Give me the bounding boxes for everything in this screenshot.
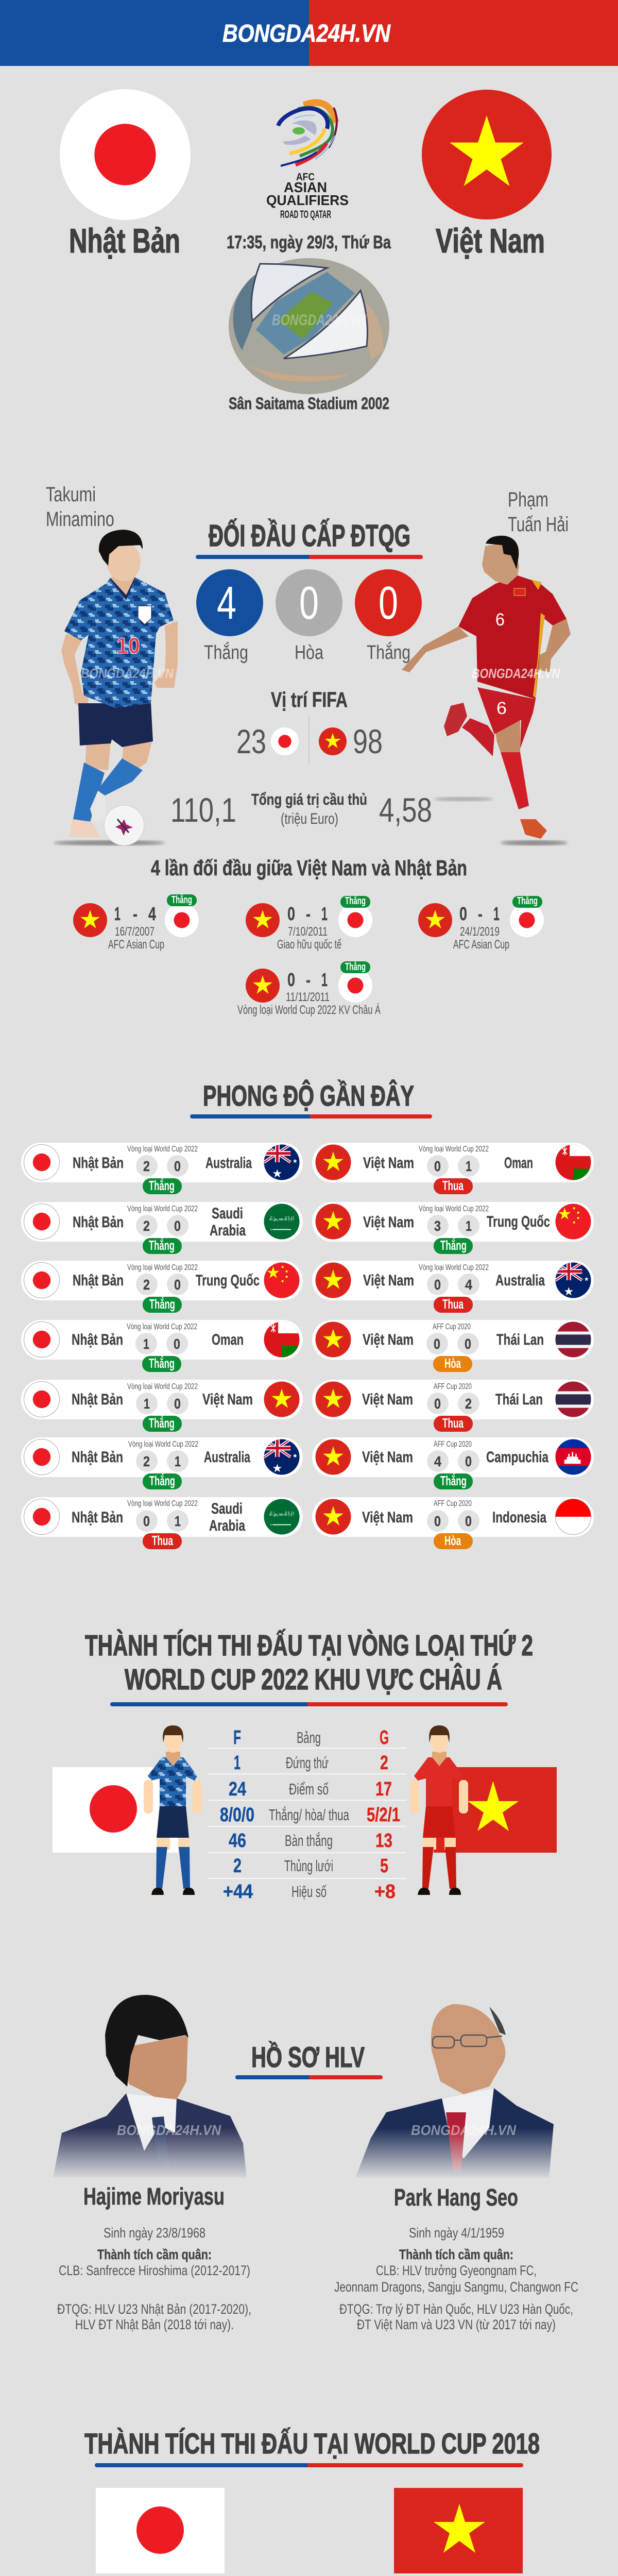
stat: Japan wins: 4 — [217, 578, 236, 629]
Japan vs Australia: 2 — [143, 1158, 150, 1174]
table row: position: 2 — [380, 1752, 388, 1774]
table row: points: 17 — [375, 1778, 392, 1800]
meeting 4: Vòng loại World Cup 2022 KV Châu Á — [237, 1003, 381, 1017]
table row: goals for — [229, 1830, 392, 1852]
Vietnam vs Cambodia: AFF Cup 2020 — [434, 1440, 472, 1449]
Japan vs Oman: Thắng — [149, 1355, 175, 1371]
Vietnam vs Cambodia: Việt Nam — [362, 1449, 413, 1466]
comparison table — [208, 1727, 406, 1903]
Japan vs Saudi Arabia (2): Saudi — [211, 1500, 243, 1517]
flag: Vietnam — [394, 2488, 523, 2573]
meeting 2: - — [306, 903, 311, 924]
Japan vs Vietnam — [21, 1380, 303, 1432]
table row: position — [234, 1752, 388, 1774]
Japan vs Vietnam: Vòng loại World Cup 2022 — [127, 1382, 198, 1391]
section: head to head — [73, 519, 544, 1017]
stat: Vietnam wins: 0 — [379, 578, 398, 629]
flag: Vietnam rectangle — [434, 1767, 557, 1853]
Japan vs Vietnam: 0 — [174, 1396, 181, 1412]
player: Phạm Tuấn Hải: 6 — [495, 610, 505, 630]
meeting 3: Thắng — [517, 894, 538, 907]
Vietnam vs Thailand: 0 — [434, 1336, 440, 1352]
Japan vs Saudi Arabia: Vòng loại World Cup 2022 — [127, 1205, 198, 1213]
Vietnam vs China — [312, 1202, 594, 1254]
section: coach profiles — [49, 1995, 578, 2332]
Vietnam vs Australia: Việt Nam — [363, 1272, 414, 1289]
Vietnam vs Oman: Oman — [504, 1155, 533, 1172]
flag: Vietnam — [422, 90, 552, 219]
table row: record — [220, 1804, 400, 1826]
Vietnam vs Australia: Vòng loại World Cup 2022 — [419, 1263, 489, 1272]
stadium caption: Sân Saitama Stadium 2002 — [229, 394, 389, 413]
table row: goals for: 46 — [229, 1830, 246, 1852]
player: Takumi Minamino: 10 — [116, 633, 140, 658]
section: recent form — [21, 1079, 594, 1549]
stat: draws — [276, 569, 342, 664]
Vietnam vs Thailand (2): 2 — [465, 1396, 472, 1412]
table row: goals against: 5 — [380, 1855, 388, 1877]
table row: position: Đứng thứ — [286, 1754, 329, 1772]
Japan vs Saudi Arabia: 0 — [174, 1218, 181, 1234]
Japan vs Australia: Australia — [205, 1155, 252, 1172]
Japan vs Saudi Arabia: Thắng — [149, 1238, 175, 1253]
Vietnam vs Oman: Việt Nam — [363, 1155, 414, 1172]
FIFA ranking: 98 — [353, 722, 383, 760]
Vietnam vs Thailand: AFF Cup 2020 — [433, 1323, 471, 1331]
Japan vs Saudi Arabia (2) — [21, 1497, 303, 1549]
FIFA ranking: 23 — [236, 722, 266, 760]
table row: goals against — [233, 1855, 388, 1877]
table row: group: Bảng — [297, 1728, 321, 1747]
Vietnam vs Thailand (2): 0 — [434, 1396, 441, 1412]
heading underline — [110, 1702, 508, 1706]
Japan vs Australia (2): Vòng loại World Cup 2022 — [128, 1440, 198, 1449]
portrait: Park Hang Seo: BONGDA24H.VN — [411, 2122, 517, 2138]
table row: goals against: Thủng lưới — [284, 1857, 333, 1875]
Vietnam vs Cambodia: 0 — [465, 1453, 472, 1469]
Vietnam vs Indonesia: Indonesia — [492, 1509, 546, 1526]
table row: goals against: 2 — [233, 1855, 242, 1877]
meeting 1: AFC Asian Cup — [108, 938, 164, 952]
Vietnam vs China: 3 — [434, 1218, 441, 1234]
table row: record: Thắng/ hòa/ thua — [269, 1806, 349, 1824]
meeting 2: 0 — [287, 903, 295, 924]
Vietnam vs Indonesia: Việt Nam — [362, 1509, 413, 1526]
squad value: 110,1 — [170, 791, 236, 829]
AFC Asian Qualifiers logo: ASIAN — [284, 179, 327, 195]
Vietnam vs Australia: 0 — [434, 1277, 441, 1293]
coach bio: Moriyasu — [57, 2183, 251, 2332]
Japan vs Vietnam: 1 — [144, 1396, 150, 1412]
Vietnam vs Thailand: 0 — [465, 1336, 471, 1352]
Vietnam vs Australia — [312, 1261, 594, 1313]
meeting 4: 1 — [321, 969, 328, 990]
FIFA ranking: Vị trí FIFA — [271, 688, 348, 711]
stat: Japan wins: Thắng — [204, 641, 248, 664]
meeting 2: Thắng — [345, 894, 366, 907]
Japan vs Saudi Arabia (2): Thua — [152, 1533, 173, 1548]
Japan vs Saudi Arabia (2): 0 — [143, 1513, 150, 1529]
Japan vs Australia: 0 — [174, 1158, 181, 1174]
figure: Japan kit — [144, 1725, 202, 1895]
Vietnam vs Oman: 0 — [434, 1158, 441, 1174]
meeting 4 — [237, 960, 381, 1017]
coach bio: Moriyasu: Sinh ngày 23/8/1968 — [104, 2225, 205, 2241]
player: Takumi Minamino: Minamino — [46, 508, 114, 531]
meeting 3: 0 — [459, 903, 467, 924]
Vietnam vs Oman — [312, 1143, 594, 1194]
Vietnam vs Australia: 4 — [465, 1277, 472, 1293]
table row: points: 24 — [229, 1778, 246, 1800]
match header — [60, 89, 552, 260]
Japan vs Australia: Nhật Bản — [73, 1155, 124, 1172]
Japan vs Australia (2): Australia — [204, 1449, 250, 1466]
Vietnam vs Thailand (2): AFF Cup 2020 — [434, 1382, 472, 1391]
table row: goal difference: Hiệu số — [291, 1883, 327, 1901]
Vietnam vs Indonesia: Hòa — [444, 1533, 461, 1548]
Japan vs Australia (2): Nhật Bản — [72, 1449, 123, 1466]
portrait: Hajime Moriyasu — [49, 1995, 252, 2180]
stadium illustration — [229, 258, 389, 394]
heading underline — [190, 1114, 432, 1118]
heading: PHONG ĐỘ GẦN ĐÂY — [203, 1079, 414, 1112]
meeting 2: Giao hữu quốc tế — [277, 938, 341, 952]
table row: goals for: 13 — [375, 1830, 392, 1852]
meeting 1: Thắng — [171, 893, 192, 906]
team name: Việt Nam: Việt Nam — [436, 222, 545, 260]
meeting 1: 1 — [114, 903, 121, 924]
flag: Japan — [60, 89, 191, 220]
squad value: Tổng giá trị cầu thủ — [251, 790, 367, 808]
Japan vs Saudi Arabia (2): Nhật Bản — [72, 1509, 123, 1526]
table row: group — [233, 1727, 389, 1749]
squad value: 4,58 — [379, 791, 432, 829]
Japan vs Vietnam: Thắng — [149, 1415, 175, 1431]
Vietnam vs Cambodia: Campuchia — [486, 1449, 548, 1466]
coach bio: Moriyasu: Thành tích cầm quân: — [97, 2247, 212, 2262]
Vietnam vs China: Trung Quốc — [487, 1213, 550, 1230]
Vietnam vs Oman: Vòng loại World Cup 2022 — [419, 1145, 489, 1154]
Japan vs Australia (2): Thắng — [149, 1473, 175, 1488]
Vietnam vs Thailand: Hòa — [444, 1355, 461, 1371]
Japan vs Vietnam: Nhật Bản — [72, 1391, 123, 1408]
meeting 4: Thắng — [345, 960, 366, 973]
header band — [0, 0, 618, 66]
squad value — [170, 790, 432, 829]
AFC Asian Qualifiers logo: AFC — [296, 172, 315, 183]
Vietnam vs Oman: Thua — [442, 1178, 464, 1193]
Japan vs Saudi Arabia (2): 1 — [175, 1513, 181, 1529]
table row: goal difference: +44 — [223, 1881, 253, 1903]
coach bio: Moriyasu: HLV ĐT Nhật Bản (2018 tới nay). — [75, 2317, 234, 2332]
Japan vs Saudi Arabia: Saudi — [212, 1205, 243, 1222]
meeting 2 — [246, 894, 372, 952]
Vietnam vs Indonesia — [312, 1497, 594, 1549]
Japan vs Australia — [21, 1143, 303, 1194]
figure: Vietnam kit — [410, 1725, 468, 1895]
stat: Vietnam wins — [355, 569, 422, 664]
Japan vs Saudi Arabia: Nhật Bản — [73, 1214, 124, 1231]
meeting 3: AFC Asian Cup — [453, 938, 509, 952]
Japan vs Oman — [21, 1320, 303, 1372]
Japan vs Vietnam: Việt Nam — [202, 1391, 253, 1408]
Japan vs Oman: Vòng loại World Cup 2022 — [127, 1323, 197, 1331]
meeting 1: 4 — [148, 903, 156, 924]
stat: draws: Hòa — [295, 642, 324, 664]
Vietnam vs Thailand (2): Thua — [442, 1415, 464, 1431]
meeting 2: 7/10/2011 — [288, 925, 328, 939]
stat: Vietnam wins: Thắng — [367, 641, 410, 664]
Vietnam vs Thailand: Thái Lan — [496, 1331, 544, 1348]
Japan vs Australia: Vòng loại World Cup 2022 — [127, 1145, 198, 1154]
portrait: Hajime Moriyasu: BONGDA24H.VN — [117, 2122, 221, 2138]
heading underline — [95, 2463, 523, 2467]
Japan vs China: Trung Quốc — [196, 1272, 260, 1289]
watermark: BONGDA24H.VN — [472, 666, 560, 681]
Japan vs Saudi Arabia (2): Vòng loại World Cup 2022 — [127, 1499, 198, 1508]
player: Phạm Tuấn Hải: 6 — [496, 699, 507, 718]
Vietnam vs Indonesia: 0 — [465, 1513, 472, 1529]
Japan vs Saudi Arabia: 2 — [143, 1218, 150, 1234]
meeting 3: 24/1/2019 — [460, 925, 500, 939]
Vietnam vs Australia: Australia — [495, 1272, 545, 1289]
Japan vs Saudi Arabia (2): Arabia — [209, 1517, 245, 1534]
table row: goal difference: +8 — [374, 1881, 396, 1903]
Japan vs Oman: 0 — [174, 1336, 180, 1352]
player name: Phạm — [508, 488, 548, 511]
section: World Cup 2022 qualifiers record — [53, 1629, 557, 1903]
meeting 1 — [73, 893, 199, 952]
Japan vs Australia (2): 2 — [143, 1453, 150, 1469]
coach bio: Park — [334, 2184, 578, 2332]
stat: Japan wins — [196, 569, 263, 664]
logo: BONGDA24H.VN — [222, 20, 391, 47]
Vietnam vs China: Thắng — [440, 1238, 467, 1253]
player: Phạm Tuấn Hải: Tuấn Hải — [508, 513, 569, 536]
Vietnam vs Australia: Thua — [442, 1296, 464, 1312]
Vietnam vs Indonesia: AFF Cup 2020 — [434, 1499, 472, 1508]
meeting 4: - — [306, 969, 311, 990]
squad value: (triệu Euro) — [281, 810, 338, 827]
Japan vs China: 0 — [174, 1277, 181, 1293]
Japan vs China — [21, 1261, 303, 1313]
Vietnam vs Indonesia: 0 — [434, 1513, 441, 1529]
Japan vs Saudi Arabia: Arabia — [210, 1222, 246, 1239]
Japan vs Australia (2) — [21, 1437, 303, 1489]
player: Takumi Minamino — [46, 483, 178, 845]
Japan vs China: 2 — [143, 1277, 150, 1293]
Japan vs Australia: Thắng — [149, 1178, 175, 1193]
Japan vs China: Vòng loại World Cup 2022 — [127, 1263, 198, 1272]
watermark: BONGDA24H.VN — [81, 666, 174, 681]
section: World Cup 2018 — [31, 2427, 543, 2576]
flag: Japan rectangle — [53, 1767, 178, 1853]
table row: group: G — [380, 1727, 389, 1749]
heading: ĐỐI ĐẦU CẤP ĐTQG — [209, 519, 410, 553]
AFC Asian Qualifiers logo: QUALIFIERS — [266, 192, 349, 208]
team name: Nhật Bản: Nhật Bản — [69, 222, 180, 260]
heading underline — [196, 555, 423, 559]
meeting 4: 0 — [287, 969, 295, 990]
Vietnam vs China: Vòng loại World Cup 2022 — [419, 1205, 489, 1213]
meeting 1: 16/7/2007 — [115, 925, 154, 939]
meeting 3 — [418, 894, 544, 952]
AFC Asian Qualifiers logo: ROAD TO QATAR — [280, 209, 331, 221]
Vietnam vs Cambodia — [312, 1437, 594, 1489]
coach bio: Moriyasu: CLB: Sanfrecce Hiroshima (2012-2017) — [59, 2263, 250, 2278]
coach bio: Park: ĐT Việt Nam và U23 VN (từ 2017 tới nay) — [357, 2317, 556, 2332]
Vietnam vs Cambodia: Thắng — [440, 1473, 467, 1488]
Vietnam vs China: Việt Nam — [363, 1214, 414, 1231]
coach bio: Park: Park Hang Seo — [394, 2184, 518, 2211]
stat: draws: 0 — [299, 578, 319, 629]
meeting 3: 1 — [493, 903, 500, 924]
coach bio: Park: Sinh ngày 4/1/1959 — [409, 2225, 504, 2241]
Vietnam vs Oman: 1 — [466, 1158, 472, 1174]
Japan vs Oman: Oman — [212, 1331, 244, 1348]
AFC Asian Qualifiers logo — [266, 103, 349, 221]
meeting 1: - — [133, 903, 138, 924]
table row: points — [229, 1778, 392, 1800]
coach bio: Park: CLB: HLV trưởng Gyeongnam FC, — [376, 2263, 537, 2278]
coach bio: Park: Thành tích cầm quân: — [399, 2247, 513, 2262]
Japan vs China: Thắng — [149, 1296, 175, 1312]
Vietnam vs Thailand (2): Thái Lan — [495, 1391, 543, 1408]
FIFA ranking — [236, 688, 383, 765]
portrait: Park Hang Seo — [350, 2004, 559, 2180]
Vietnam vs China: 1 — [466, 1218, 472, 1234]
sub heading: meetings: 4 lần đối đầu giữa Việt Nam và Nhật Bản — [151, 856, 467, 880]
ball — [104, 805, 144, 845]
Vietnam vs Thailand: Việt Nam — [363, 1331, 414, 1348]
Japan vs China: Nhật Bản — [73, 1272, 124, 1289]
meeting 3: - — [478, 903, 483, 924]
Vietnam vs Cambodia: 4 — [434, 1453, 441, 1469]
Vietnam vs Thailand — [312, 1320, 594, 1372]
heading underline — [235, 2075, 383, 2079]
coach bio: Moriyasu: ĐTQG: HLV U23 Nhật Bản (2017-2020), — [57, 2301, 251, 2317]
player: Phạm Tuấn Hải — [402, 488, 571, 845]
Japan vs Oman: 1 — [143, 1336, 149, 1352]
Vietnam vs Thailand (2) — [312, 1380, 594, 1432]
table row: record: 8/0/0 — [220, 1804, 254, 1826]
meeting 4: 11/11/2011 — [286, 990, 330, 1004]
coach bio: Moriyasu: Hajime Moriyasu — [83, 2183, 225, 2210]
table row: goal difference — [223, 1881, 396, 1903]
Japan vs Australia (2): 1 — [175, 1453, 181, 1469]
flag: Japan — [96, 2488, 225, 2573]
Japan vs Oman: Nhật Bản — [72, 1331, 123, 1348]
meeting 2: 1 — [321, 903, 328, 924]
table row: record: 5/2/1 — [367, 1804, 400, 1826]
Japan vs Saudi Arabia — [21, 1202, 303, 1254]
table row: points: Điểm số — [289, 1780, 329, 1798]
Vietnam vs Thailand (2): Việt Nam — [362, 1391, 413, 1408]
heading: HỒ SƠ HLV — [251, 2041, 365, 2073]
match time: 17:35, ngày 29/3, Thứ Ba — [227, 232, 391, 252]
table row: group: F — [233, 1727, 241, 1749]
table row: goals for: Bàn thắng — [285, 1832, 333, 1850]
player name: Takumi — [46, 483, 96, 506]
stadium illustration: BONGDA24H.VN — [272, 312, 367, 329]
table row: position: 1 — [234, 1752, 241, 1774]
